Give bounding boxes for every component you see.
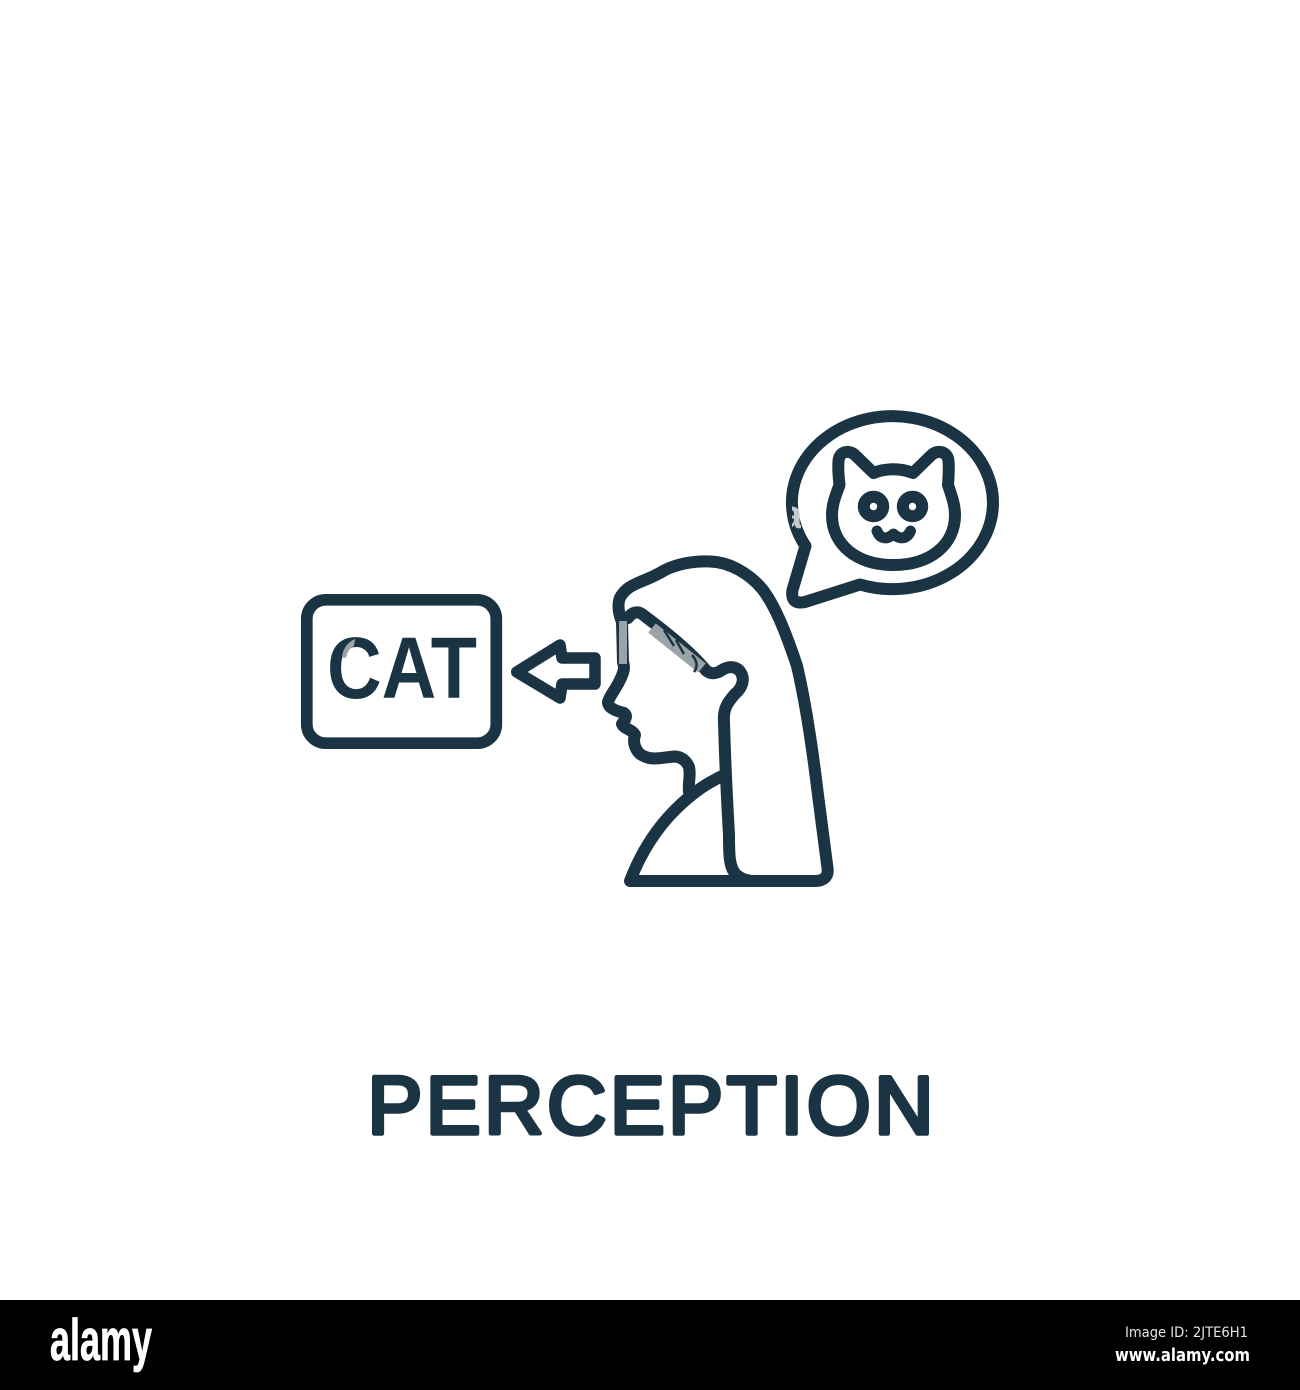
speech bubble outline bbox=[792, 416, 993, 602]
image id: Image ID: 2JTE6H1 bbox=[1125, 1325, 1248, 1341]
cat left eye bbox=[864, 497, 883, 516]
infographic canvas bbox=[0, 410, 1300, 1390]
hair and shoulder outline bbox=[618, 561, 828, 881]
footer bar bbox=[0, 1300, 1300, 1390]
website: www.alamy.com bbox=[1115, 1345, 1250, 1366]
title: PERCEPTION: PERCEPTION bbox=[368, 1061, 934, 1152]
inner hair line, ear and hair front bbox=[628, 612, 755, 881]
label: CAT: CAT bbox=[327, 620, 477, 717]
icon: woman in profile bbox=[608, 561, 828, 881]
cat right eye bbox=[903, 497, 922, 516]
icon: arrow pointing to card bbox=[517, 645, 595, 698]
cat head bbox=[832, 452, 955, 565]
icon: CAT word card bbox=[307, 600, 496, 743]
watermark fragments bbox=[619, 493, 803, 672]
cat mouth bbox=[877, 531, 910, 538]
icon: speech bubble with cat bbox=[792, 416, 993, 602]
footer logo: alamy: alamy bbox=[50, 1308, 152, 1373]
watermark fragments: a bbox=[780, 493, 803, 537]
face profile and neck bbox=[608, 622, 690, 792]
